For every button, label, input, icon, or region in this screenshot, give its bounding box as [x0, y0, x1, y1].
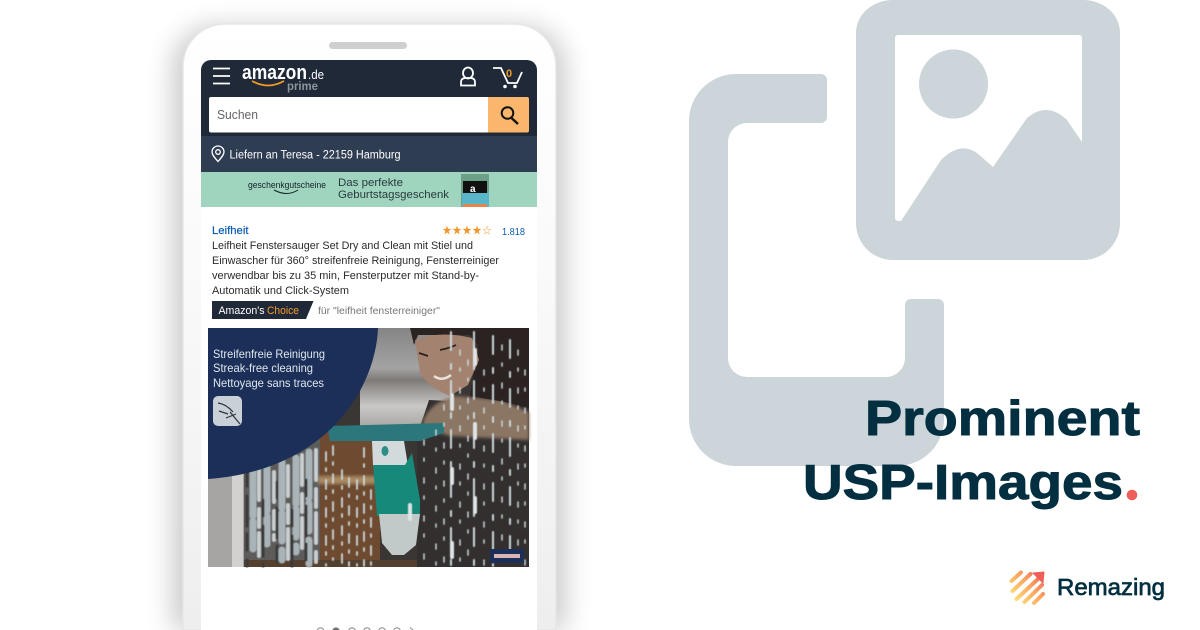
background icon: image placeholder	[856, 0, 1120, 260]
gift card: a	[470, 184, 476, 195]
woman	[410, 328, 529, 567]
amazon logo: .de	[308, 68, 324, 82]
product title: verwendbar bis zu 35 min, Fensterputzer mit Stand-by-	[212, 270, 479, 282]
USP text: Nettoyage sans traces	[213, 376, 324, 390]
amazon logo	[242, 62, 324, 93]
amazon's choice badge: Choice	[267, 305, 299, 317]
photo backdrop	[208, 328, 529, 567]
broad pale streaks on the left	[253, 452, 309, 564]
search input	[209, 97, 489, 132]
torso	[417, 400, 529, 567]
title: .	[1125, 456, 1139, 510]
icon: rising stripes arrow	[1012, 572, 1044, 603]
shoulder and arm	[423, 396, 529, 440]
amazon's choice badge	[212, 301, 314, 319]
brand logo	[490, 549, 524, 563]
product title	[212, 240, 499, 297]
icon: cart: 0	[506, 68, 512, 80]
window frame	[208, 470, 244, 567]
title	[803, 392, 1140, 510]
hair	[410, 328, 529, 408]
carousel dots	[317, 628, 413, 630]
screen	[201, 60, 537, 630]
screen background	[201, 60, 537, 630]
speaker	[329, 42, 407, 49]
gift card	[461, 174, 489, 207]
product title: Automatik und Click-System	[212, 285, 349, 297]
Remazing logo	[1012, 572, 1165, 603]
search term: für "leifheit fensterreiniger"	[318, 306, 440, 317]
USP product image	[208, 328, 529, 567]
title: USP-Images	[803, 456, 1123, 510]
promo banner: geschenkgutscheine	[248, 180, 326, 191]
blue USP overlay	[208, 328, 378, 479]
water streaks	[247, 332, 525, 566]
icon: cart	[493, 68, 522, 88]
product details	[212, 222, 525, 319]
promo banner: Das perfekte	[338, 177, 403, 189]
amazon's choice badge: Amazon's	[218, 305, 265, 317]
face	[415, 334, 479, 396]
amazon header	[201, 60, 537, 136]
USP text: Streak-free cleaning	[213, 361, 313, 375]
brand: Leifheit	[212, 225, 248, 237]
rating count: 1.818	[502, 227, 525, 238]
product title: Einwascher für 360° streifenfreie Reinigung, Fensterreiniger	[212, 255, 499, 267]
product title: Leifheit Fenstersauger Set Dry and Clean mit Stiel und	[212, 240, 473, 252]
phone mockup	[172, 24, 566, 630]
delivery bar: Liefern an Teresa - 22159 Hamburg	[230, 150, 400, 162]
promo banner: Geburtstagsgeschenk	[338, 189, 450, 201]
search input: Suchen	[217, 108, 258, 122]
promo banner	[201, 172, 537, 207]
amazon logo: prime	[287, 79, 318, 93]
icon: squeegee badge	[213, 396, 242, 426]
icon: location pin	[212, 146, 224, 162]
search button	[488, 97, 529, 132]
room interior centre	[320, 430, 380, 567]
amazon logo: amazon	[242, 62, 307, 84]
phone shadow	[172, 26, 566, 630]
phone body	[183, 24, 556, 630]
wordmark: Remazing	[1057, 574, 1165, 600]
drops over the woman	[451, 332, 510, 566]
room interior left	[244, 430, 334, 567]
title: Prominent	[865, 392, 1140, 446]
USP text: Streifenfreie Reinigung	[213, 347, 325, 361]
USP text	[213, 347, 325, 390]
icon: menu	[213, 68, 230, 84]
squeegee	[327, 423, 444, 555]
window sky	[360, 328, 450, 428]
background icon: phone bracket	[689, 74, 944, 466]
drops on the centre	[326, 446, 371, 566]
delivery bar	[201, 136, 537, 172]
rating stars: ★★★★☆	[442, 222, 492, 238]
icon: account	[461, 68, 475, 86]
